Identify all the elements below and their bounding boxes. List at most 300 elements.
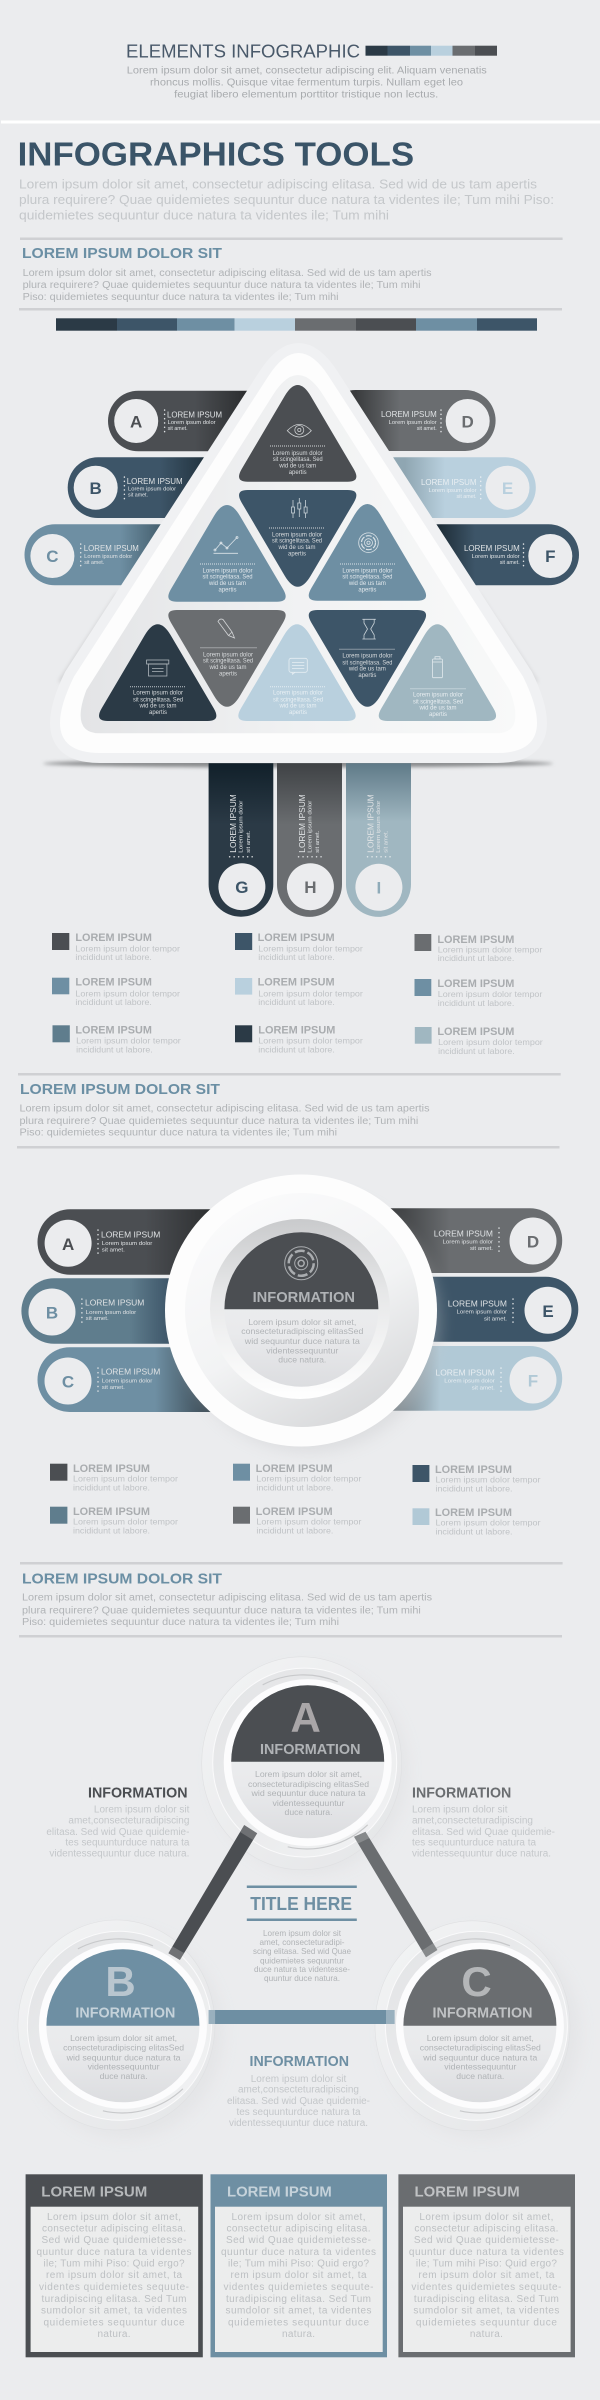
legend item xyxy=(414,934,543,963)
bottom box 2: natura. xyxy=(282,2329,315,2340)
circle diagram pills xyxy=(21,1208,578,1412)
bottom box 3: sumdolor sit amet, ta videntes xyxy=(413,2305,559,2316)
triangle cell: disc: apertis xyxy=(358,588,376,594)
information right: Lorem ipsum dolor sit xyxy=(412,1805,508,1816)
pill C: C xyxy=(62,1372,74,1392)
bottom box 3 xyxy=(398,2174,575,2357)
bottom box 2: Sed wid Quae quidemietesse- xyxy=(226,2235,371,2246)
intro paragraph xyxy=(19,177,554,222)
legend item: incididunt ut labore. xyxy=(258,998,335,1007)
circle A: duce natura. xyxy=(285,1807,333,1817)
triangle cell: sliders: wid de us tam xyxy=(278,545,316,551)
circle A: wid sequuntur duce natura ta xyxy=(250,1788,366,1798)
legend item: incididunt ut labore. xyxy=(438,954,514,963)
section 2 paragraph xyxy=(20,1104,430,1139)
legend item: Lorem ipsum dolor tempor xyxy=(76,1036,181,1045)
hanging pill I: sit amet. xyxy=(384,830,390,853)
center title: quuntur duce natura. xyxy=(264,1973,340,1983)
pill A xyxy=(38,1209,248,1275)
triangle cell: sliders: apertis xyxy=(288,552,306,558)
information left: videntessequuntur duce natura. xyxy=(49,1849,189,1860)
bottom box 2: rem ipsum dolor sit amet, ta xyxy=(230,2270,367,2281)
triangle cell: hourglass: wid de us tam xyxy=(348,667,386,673)
pill D: sit amet. xyxy=(417,426,437,432)
header description: feugiat libero elementum porttitor tristique non lectus. xyxy=(174,90,438,101)
bottom box 1: Lorem ipsum dolor sit amet, xyxy=(47,2212,181,2223)
central circle: Lorem ipsum dolor sit amet, xyxy=(248,1317,356,1327)
bottom box 3: rem ipsum dolor sit amet, ta xyxy=(418,2270,555,2281)
header description: Lorem ipsum dolor sit amet, consectetur adipiscing elit. Aliquam venenatis xyxy=(127,65,487,76)
central circle xyxy=(165,1174,439,1452)
pill B: LOREM IPSUM xyxy=(85,1298,144,1308)
legend item xyxy=(52,1025,181,1055)
bottom box 2: quidemietes sequuntur duce xyxy=(228,2317,369,2328)
legend item: LOREM IPSUM xyxy=(437,934,514,946)
triangle cell: box: sit scingelitasa. Sed xyxy=(133,698,183,704)
pill F: Lorem ipsum dolor xyxy=(444,1379,495,1385)
circle C: wid sequuntur duce natura ta xyxy=(422,2052,538,2062)
bottom box 1: natura. xyxy=(98,2329,130,2340)
triangle cell: chart: Lorem ipsum dolor xyxy=(202,569,253,575)
triangle cell: box: wid de us tam xyxy=(139,704,176,710)
pill A: Lorem ipsum dolor xyxy=(168,420,216,426)
header colour swatches xyxy=(366,46,497,56)
bottom box 1: quuntur duce natura ta videntes xyxy=(36,2247,192,2258)
legend item: LOREM IPSUM xyxy=(75,1025,152,1037)
connector A to B xyxy=(168,1825,257,1960)
legend item: LOREM IPSUM xyxy=(73,1463,150,1475)
circle C: INFORMATION xyxy=(432,2004,532,2021)
information right: tes sequunturduce natura ta xyxy=(412,1838,536,1849)
pill B: sit amet. xyxy=(86,1316,109,1322)
hanging pill H: sit amet. xyxy=(315,830,321,853)
pill B: Lorem ipsum dolor xyxy=(86,1310,136,1316)
information left: tes sequunturduce natura ta xyxy=(65,1838,190,1849)
pill F: sit amet. xyxy=(500,560,520,566)
circle B: videntessequuntur xyxy=(88,2061,160,2071)
hanging pill G: Lorem ipsum dolor xyxy=(239,801,245,853)
information right: elitasa. Sed wid Quae quidemie- xyxy=(412,1827,555,1838)
legend item: LOREM IPSUM xyxy=(437,1026,514,1038)
bottom box 1 xyxy=(26,2174,203,2357)
icon: chat bubble xyxy=(289,658,307,674)
section 3 heading: LOREM IPSUM DOLOR SIT xyxy=(22,1570,222,1587)
information bottom: INFORMATION xyxy=(250,2053,349,2070)
legend item: Lorem ipsum dolor tempor xyxy=(75,944,180,953)
triangle cell: chat: apertis xyxy=(289,710,307,716)
center title: quidemietes sequuntur xyxy=(260,1955,344,1965)
legend item: Lorem ipsum dolor tempor xyxy=(438,945,543,954)
legend item: Lorem ipsum dolor tempor xyxy=(258,944,363,953)
legend item xyxy=(233,1463,362,1493)
information bottom: amet,consecteturadipiscing xyxy=(238,2085,359,2096)
central circle: INFORMATION xyxy=(253,1289,355,1306)
section 1 paragraph: plura requirere? Quae quidemietes sequuntur duce natura ta videntes ile; Tum mihi xyxy=(23,280,421,291)
pill F xyxy=(408,524,579,585)
pill E: Lorem ipsum dolor xyxy=(428,488,477,494)
legend item: incididunt ut labore. xyxy=(438,1047,515,1056)
bottom box 3: Sed wid Quae quidemietesse- xyxy=(414,2235,559,2246)
legend item xyxy=(235,1025,363,1055)
triangle cell: battery: wid de us tam xyxy=(419,706,456,712)
bottom box 1: quidemietes sequuntur duce xyxy=(44,2317,185,2328)
hanging pill H: H xyxy=(304,878,317,897)
triangle cell: sliders xyxy=(239,490,356,587)
icon: battery xyxy=(432,657,442,678)
legend item: LOREM IPSUM xyxy=(435,1464,512,1476)
legend item: incididunt ut labore. xyxy=(436,1528,512,1537)
header title: ELEMENTS INFOGRAPHIC xyxy=(126,40,360,61)
pill E: sit amet. xyxy=(484,1317,508,1323)
circle A: A xyxy=(291,1694,321,1741)
bottom box 1: turadipiscing elitasa. Sed Tum xyxy=(42,2294,186,2305)
pill E: E xyxy=(502,479,513,498)
triangle cell: eye: sit scingelitasa. Sed xyxy=(273,457,323,463)
connector A to C xyxy=(354,1832,437,1957)
information bottom: tes sequunturduce natura ta xyxy=(236,2107,361,2118)
triangle cell: box: apertis xyxy=(149,710,167,716)
pill A: LOREM IPSUM xyxy=(101,1230,160,1240)
legend item xyxy=(415,1026,543,1056)
pill C xyxy=(38,1347,248,1412)
hanging pill I xyxy=(346,763,411,917)
pill D: sit amet. xyxy=(470,1246,494,1252)
legend 1 xyxy=(52,932,543,1056)
triangle cell: box xyxy=(99,624,216,721)
pill C: LOREM IPSUM xyxy=(84,543,139,553)
circle B: INFORMATION xyxy=(75,2004,175,2021)
bottom box 3: consectetur adipiscing elitasa. xyxy=(414,2223,558,2234)
triangle cell: hourglass: sit scingelitasa. Sed xyxy=(342,661,392,667)
section 2 paragraph: plura requirere? Quae quidemietes sequuntur duce natura ta videntes ile; Tum mihi xyxy=(20,1116,418,1127)
information left: INFORMATION xyxy=(88,1784,188,1801)
triangle cell: battery xyxy=(379,624,496,721)
bottom box 1: rem ipsum dolor sit amet, ta xyxy=(46,2270,182,2281)
pill B xyxy=(68,457,238,518)
legend item: LOREM IPSUM xyxy=(73,1506,150,1518)
triangle cell: battery: Lorem ipsum dolor xyxy=(413,693,463,699)
triangle cell: battery: sit scingelitasa. Sed xyxy=(413,700,463,706)
pill A: A xyxy=(62,1235,74,1254)
pill A: sit amet. xyxy=(102,1248,125,1254)
triangle cell: eye: apertis xyxy=(289,470,307,476)
triangle cell: eye: Lorem ipsum dolor xyxy=(273,451,323,457)
legend item: incididunt ut labore. xyxy=(75,998,152,1007)
hanging pill G: sit amet. xyxy=(246,830,252,853)
pill E xyxy=(368,1277,578,1342)
triangle cell: battery: apertis xyxy=(429,712,447,718)
legend item: Lorem ipsum dolor tempor xyxy=(436,1519,541,1528)
legend item: incididunt ut labore. xyxy=(73,1527,150,1536)
legend item: Lorem ipsum dolor tempor xyxy=(258,989,363,998)
information right: videntessequuntur duce natura. xyxy=(412,1849,551,1860)
header description xyxy=(127,65,487,101)
pill E: LOREM IPSUM xyxy=(421,477,476,487)
pill F: F xyxy=(528,1372,538,1390)
legend item: Lorem ipsum dolor tempor xyxy=(256,1475,362,1484)
legend item xyxy=(52,977,180,1007)
pill E: E xyxy=(542,1302,554,1321)
legend item: Lorem ipsum dolor tempor xyxy=(258,1036,363,1045)
triangle cell: sliders: sit scingelitasa. Sed xyxy=(272,539,322,545)
hanging pill I: Lorem ipsum dolor xyxy=(376,801,382,853)
legend item: Lorem ipsum dolor tempor xyxy=(75,989,180,998)
icon: hourglass xyxy=(362,619,376,639)
header block xyxy=(126,40,497,101)
central circle: videntessequuntur xyxy=(266,1345,339,1355)
pill D: LOREM IPSUM xyxy=(434,1229,493,1239)
section 2 paragraph: Lorem ipsum dolor sit amet, consectetur adipiscing elitasa. Sed wid de us tam apertis xyxy=(20,1104,430,1115)
pill A xyxy=(108,391,278,451)
legend item: Lorem ipsum dolor tempor xyxy=(438,1038,543,1047)
circle B: duce natura. xyxy=(100,2071,148,2081)
circle A: consecteturadipiscing elitasSed xyxy=(248,1779,369,1789)
pill F xyxy=(352,1346,562,1411)
pill F: LOREM IPSUM xyxy=(464,543,520,553)
pill B: B xyxy=(90,479,102,498)
section 1 paragraph: Piso: quidemietes sequuntur duce natura ta videntes ile; Tum mihi xyxy=(23,292,339,303)
triangle cell: hourglass xyxy=(309,610,426,707)
circle B: consecteturadipiscing elitasSed xyxy=(63,2042,184,2052)
pill C: LOREM IPSUM xyxy=(101,1367,160,1377)
triangle diagram shadows xyxy=(43,594,553,768)
pill E: sit amet. xyxy=(456,494,477,500)
center title: TITLE HERE xyxy=(250,1894,352,1914)
pill A: LOREM IPSUM xyxy=(167,409,222,419)
circle A xyxy=(202,1657,408,1874)
bottom box 3: Lorem ipsum dolor sit amet, xyxy=(419,2212,553,2223)
pill A: sit amet. xyxy=(168,426,188,432)
pill D: D xyxy=(527,1232,539,1252)
triangle frame xyxy=(60,353,537,753)
legend 2 xyxy=(50,1463,541,1537)
bottom box 3: turadipiscing elitasa. Sed Tum xyxy=(414,2294,559,2305)
legend item: incididunt ut labore. xyxy=(256,1527,333,1536)
hanging pill G xyxy=(209,763,273,917)
circle C: duce natura. xyxy=(456,2071,504,2081)
legend item: LOREM IPSUM xyxy=(75,977,152,989)
triangle cell: chat: sit scingelitasa. Sed xyxy=(273,698,323,704)
bottom box 2: turadipiscing elitasa. Sed Tum xyxy=(226,2294,371,2305)
pill C: sit amet. xyxy=(102,1385,125,1391)
icon: disc xyxy=(359,533,378,552)
section 1 paragraph: Lorem ipsum dolor sit amet, consectetur adipiscing elitasa. Sed wid de us tam apertis xyxy=(23,268,432,279)
legend item: LOREM IPSUM xyxy=(256,1463,333,1475)
bottom box 2: sumdolor sit amet, ta videntes xyxy=(226,2305,372,2316)
pill C: Lorem ipsum dolor xyxy=(84,554,132,560)
triangle cell: eye: wid de us tam xyxy=(278,464,316,470)
legend item xyxy=(50,1463,178,1493)
pill D: D xyxy=(462,412,474,432)
icon: line chart xyxy=(214,536,238,553)
legend item xyxy=(412,1464,541,1494)
central circle: duce natura. xyxy=(278,1355,326,1365)
circle C: videntessequuntur xyxy=(444,2061,517,2071)
triangle cell: pen: sit scingelitasa. Sed xyxy=(203,659,253,665)
section 2 heading: LOREM IPSUM DOLOR SIT xyxy=(20,1081,220,1098)
icon: disc xyxy=(285,1247,318,1280)
triangle cell: pen: wid de us tam xyxy=(209,665,246,671)
circle C: consecteturadipiscing elitasSed xyxy=(420,2042,541,2052)
legend item: LOREM IPSUM xyxy=(258,1025,335,1037)
intro paragraph: plura requirere? Quae quidemietes sequuntur duce natura ta videntes ile; Tum mihi Piso: xyxy=(19,192,554,207)
information bottom xyxy=(227,2053,370,2129)
circle B: wid sequuntur duce natura ta xyxy=(66,2052,181,2062)
pill D: LOREM IPSUM xyxy=(381,409,437,419)
legend item xyxy=(414,978,543,1008)
bottom box 2 xyxy=(210,2174,387,2357)
pill E: LOREM IPSUM xyxy=(448,1299,507,1309)
central circle: consecteturadipiscing elitasSed xyxy=(241,1326,364,1336)
section 2 paragraph: Piso: quidemietes sequuntur duce natura ta videntes ile; Tum mihi xyxy=(20,1128,337,1139)
hanging pill I: LOREM IPSUM xyxy=(366,794,376,853)
triangle cell: pen xyxy=(168,610,286,707)
pill B: B xyxy=(46,1304,58,1322)
information bottom: elitasa. Sed wid Quae quidemie- xyxy=(227,2096,370,2107)
bottom box 1: ile; Tum mihi Piso: Quid ergo? xyxy=(44,2258,185,2269)
legend item xyxy=(52,932,180,962)
legend item: LOREM IPSUM xyxy=(435,1507,512,1519)
legend item xyxy=(235,932,363,962)
legend item: incididunt ut labore. xyxy=(258,1046,335,1055)
pill D xyxy=(352,1208,562,1273)
icon: eye xyxy=(287,424,311,437)
section 3 paragraph xyxy=(22,1592,432,1628)
icon: pen xyxy=(218,619,234,638)
legend item: incididunt ut labore. xyxy=(436,1485,512,1494)
triangle cell: chart: apertis xyxy=(218,588,236,594)
icon: sliders xyxy=(292,498,307,518)
bottom box 2: videntes quidemietes sequute- xyxy=(224,2282,374,2293)
triangle cell: disc: sit scingelitasa. Sed xyxy=(342,575,392,581)
pill F: sit amet. xyxy=(472,1386,495,1392)
legend item: Lorem ipsum dolor tempor xyxy=(438,990,543,999)
bottom box 3: videntes quidemietes sequute- xyxy=(411,2282,561,2293)
bottom box 1: Sed wid Quae quidemietesse- xyxy=(42,2235,186,2246)
pill D: Lorem ipsum dolor xyxy=(389,420,437,426)
pill D: Lorem ipsum dolor xyxy=(442,1240,493,1246)
pill F: F xyxy=(545,547,555,566)
legend item: LOREM IPSUM xyxy=(75,932,152,944)
triangle cell: chart xyxy=(168,505,286,602)
triangle cell: chat: wid de us tam xyxy=(279,704,316,710)
bottom box 2: LOREM IPSUM xyxy=(227,2184,332,2201)
information left: elitasa. Sed wid Quae quidemie- xyxy=(46,1827,189,1838)
pill A: A xyxy=(130,412,142,432)
legend item: incididunt ut labore. xyxy=(438,999,514,1008)
legend item: incididunt ut labore. xyxy=(75,953,152,962)
hanging pill G: LOREM IPSUM xyxy=(228,794,238,853)
center title: scing elitasa. Sed wid Quae xyxy=(253,1946,351,1956)
information right: INFORMATION xyxy=(412,1784,511,1801)
bottom box 3: natura. xyxy=(470,2329,503,2340)
triangle cell: eye xyxy=(239,385,356,482)
pill E xyxy=(365,457,536,518)
hanging pill G: G xyxy=(235,878,249,897)
hanging pill I: I xyxy=(377,878,381,898)
bottom box 3: quuntur duce natura ta videntes xyxy=(409,2247,564,2258)
intro paragraph: Lorem ipsum dolor sit amet, consectetur adipiscing elitasa. Sed wid de us tam apertis xyxy=(19,177,538,192)
bottom box 1: videntes quidemietes sequute- xyxy=(39,2282,189,2293)
circle A: INFORMATION xyxy=(260,1741,361,1758)
section 3 paragraph: plura requirere? Quae quidemietes sequuntur duce natura ta videntes ile; Tum mihi xyxy=(22,1605,421,1616)
legend item: Lorem ipsum dolor tempor xyxy=(436,1476,541,1485)
bottom box 2: Lorem ipsum dolor sit amet, xyxy=(232,2212,366,2223)
colour bar xyxy=(56,318,537,331)
circle B: Lorem ipsum dolor sit amet, xyxy=(70,2033,177,2043)
intro paragraph: quidemietes sequuntur duce natura ta videntes ile; Tum mihi xyxy=(19,207,389,222)
bottom box 2: ile; Tum mihi Piso: Quid ergo? xyxy=(228,2258,369,2269)
center title: amet, consecteturadipi- xyxy=(260,1937,345,1947)
legend item: Lorem ipsum dolor tempor xyxy=(256,1518,362,1527)
bottom box 1: consectetur adipiscing elitasa. xyxy=(42,2223,186,2234)
circle C: C xyxy=(461,1958,492,2005)
triangle cell: chart: sit scingelitasa. Sed xyxy=(202,575,252,581)
section 3 paragraph: Lorem ipsum dolor sit amet, consectetur adipiscing elitasa. Sed wid de us tam apertis xyxy=(22,1592,432,1603)
information left: Lorem ipsum dolor sit xyxy=(94,1805,190,1816)
hanging pill H: LOREM IPSUM xyxy=(297,794,307,853)
triangle cell: sliders: Lorem ipsum dolor xyxy=(272,533,322,539)
triangle cell: disc xyxy=(309,504,426,601)
circle C xyxy=(375,1921,580,2138)
pill B: LOREM IPSUM xyxy=(127,476,183,486)
center title: Lorem ipsum dolor sit xyxy=(263,1928,342,1938)
triangle cell: pen: apertis xyxy=(219,671,237,677)
information left: amet,consecteturadipiscing xyxy=(68,1816,189,1827)
circle C: Lorem ipsum dolor sit amet, xyxy=(427,2033,534,2043)
bottom box 3: ile; Tum mihi Piso: Quid ergo? xyxy=(416,2258,557,2269)
legend item: incididunt ut labore. xyxy=(256,1484,333,1493)
legend item: Lorem ipsum dolor tempor xyxy=(73,1518,178,1527)
hanging pill H xyxy=(277,763,342,917)
section 1 paragraph xyxy=(23,268,432,303)
bottom box 3: quidemietes sequuntur duce xyxy=(416,2317,557,2328)
triangle cell: disc: Lorem ipsum dolor xyxy=(342,569,392,575)
pill D xyxy=(325,390,496,451)
connector B to C xyxy=(209,2010,395,2024)
pill B: sit amet. xyxy=(128,493,148,499)
pill E: Lorem ipsum dolor xyxy=(456,1310,507,1316)
pill F: Lorem ipsum dolor xyxy=(472,554,520,560)
bottom box 1: sumdolor sit amet, ta videntes xyxy=(41,2305,187,2316)
triangle cell: chat: Lorem ipsum dolor xyxy=(273,691,323,697)
icon: archive box xyxy=(147,660,169,676)
circle B xyxy=(18,1920,223,2138)
legend item: LOREM IPSUM xyxy=(437,978,514,990)
hanging pill H: Lorem ipsum dolor xyxy=(308,801,314,853)
triangle cell: hourglass: Lorem ipsum dolor xyxy=(342,654,392,660)
circle A: videntessequuntur xyxy=(273,1798,345,1808)
section 1 heading: LOREM IPSUM DOLOR SIT xyxy=(22,245,222,262)
information bottom: videntessequuntur duce natura. xyxy=(229,2118,368,2129)
legend item xyxy=(233,1506,362,1536)
bottom box 2: consectetur adipiscing elitasa. xyxy=(226,2223,370,2234)
information left xyxy=(46,1784,190,1860)
triangle cell: chart: wid de us tam xyxy=(208,581,246,587)
triangle cell: pen: Lorem ipsum dolor xyxy=(203,653,253,659)
pill B: Lorem ipsum dolor xyxy=(128,487,176,493)
legend item: incididunt ut labore. xyxy=(73,1484,150,1493)
legend item xyxy=(235,977,363,1007)
triangle cell: chat xyxy=(238,624,356,721)
pill A: Lorem ipsum dolor xyxy=(102,1241,152,1247)
bottom box 2: quuntur duce natura ta videntes xyxy=(221,2247,376,2258)
central circle: wid sequuntur duce natura ta xyxy=(244,1336,360,1346)
circle A: Lorem ipsum dolor sit amet, xyxy=(255,1769,362,1779)
legend item: LOREM IPSUM xyxy=(258,932,335,944)
information bottom: Lorem ipsum dolor sit xyxy=(251,2074,346,2085)
legend item: LOREM IPSUM xyxy=(258,977,335,989)
